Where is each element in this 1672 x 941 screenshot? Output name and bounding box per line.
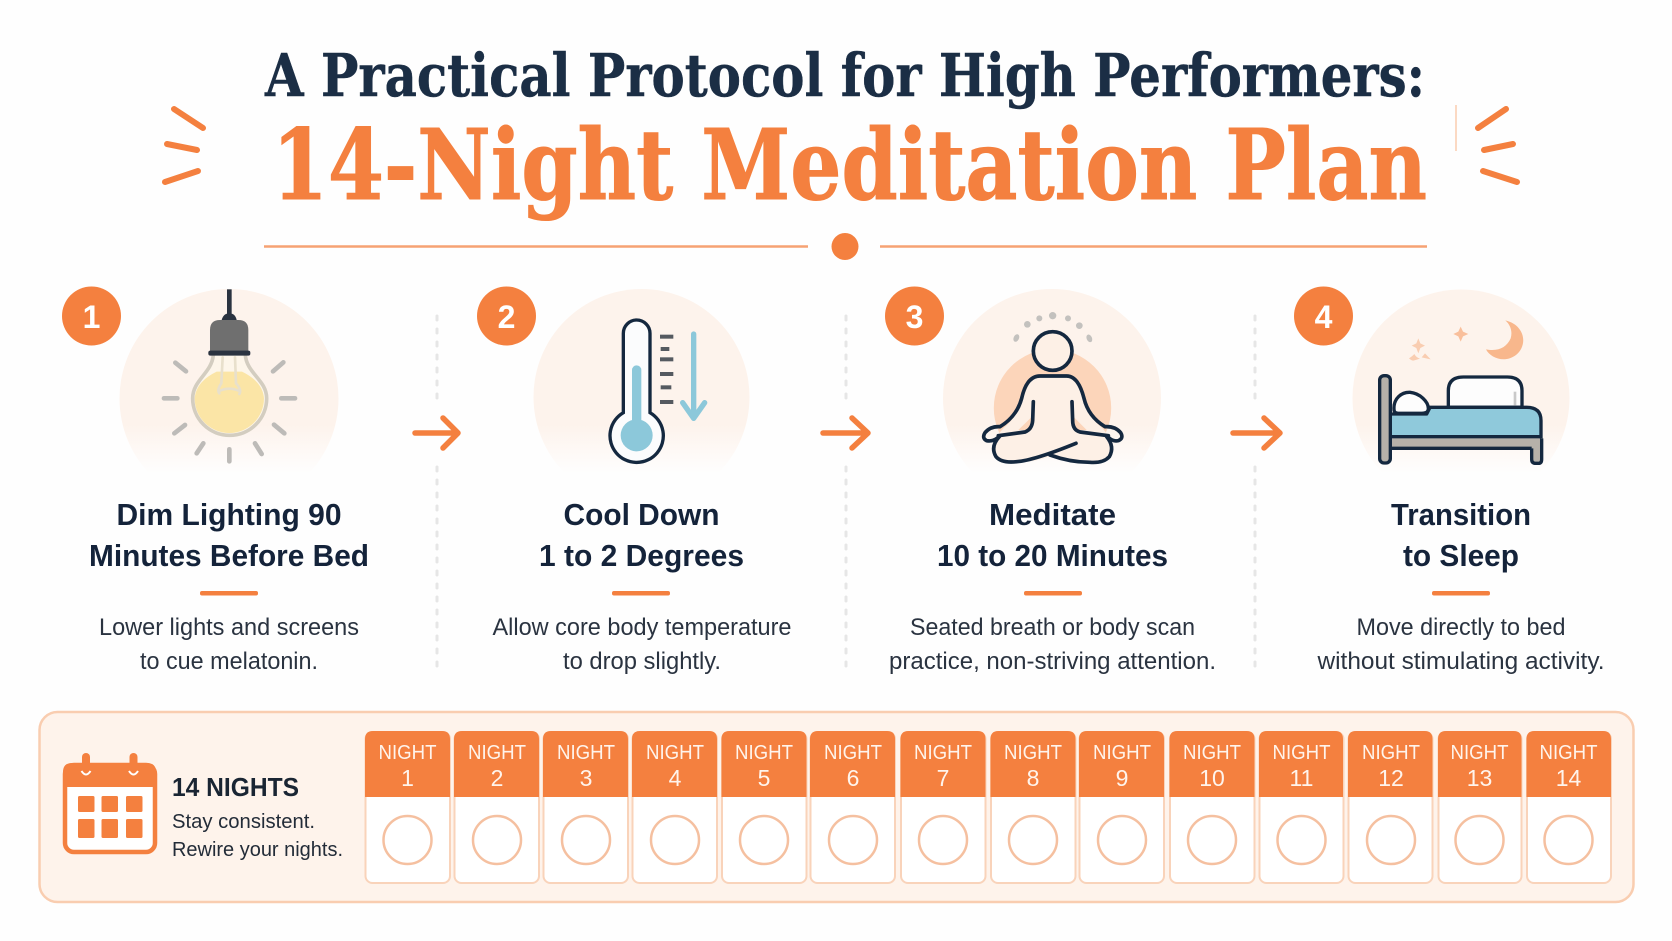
heading: to Sleep [1403,538,1519,573]
night card 10 [1170,731,1254,883]
tracker caption: Stay consistent. [172,810,315,833]
night card 3: NIGHT [557,742,615,764]
tracker caption: Rewire your nights. [172,838,343,861]
night card 4: 4 [669,765,682,791]
icon: left sparkle rays [165,109,203,182]
heading: 1 to 2 Degrees [539,538,744,573]
description: Seated breath or body scan [910,614,1195,641]
night card 7: 7 [937,765,949,791]
icon: calendar [63,753,156,852]
heading: Meditate [989,497,1116,532]
icon: right sparkle rays [1456,105,1517,182]
night card 8: NIGHT [1004,742,1062,764]
night card 10: 10 [1199,765,1225,791]
night card 6: NIGHT [824,742,882,764]
description: practice, non-striving attention. [889,648,1216,675]
description: without stimulating activity. [1316,648,1604,675]
heading [937,497,1168,573]
description [99,614,359,675]
accent rule [1432,591,1490,596]
title line 2: 14-Night Meditation Plan [272,108,1427,222]
heading: Cool Down [564,497,720,532]
night card 11 [1259,731,1344,883]
panel: step 3 [885,286,1216,675]
title [264,41,1427,222]
accent rule [1024,591,1082,596]
icon: light bulb [120,289,338,508]
night card 6 [810,731,895,883]
heading: Minutes Before Bed [89,538,369,573]
night card 3: 3 [580,765,592,791]
description: Move directly to bed [1356,614,1566,641]
night card 10: NIGHT [1183,742,1241,764]
night card 8 [990,731,1076,883]
night card 14: 14 [1556,765,1581,791]
night card 6: 6 [847,765,859,791]
description: Allow core body temperature [492,614,792,641]
night card 5: 5 [758,765,770,791]
icon: bed with moon and stars [1352,290,1570,506]
icon: meditating figure [943,289,1161,464]
badge 2 [477,286,536,346]
night card 12: 12 [1378,765,1404,791]
night card 11: NIGHT [1272,742,1330,764]
badge 3 [885,286,944,346]
arrow: step 1 to 2 [415,418,458,448]
arrow: step 2 to 3 [823,418,868,448]
description: to drop slightly. [563,648,721,675]
heading: Transition [1391,497,1531,532]
night card 7: NIGHT [914,742,972,764]
badge 1 [62,286,121,346]
night card 13: NIGHT [1450,742,1508,764]
night card 14: NIGHT [1540,742,1598,764]
badge 4: 4 [1315,299,1333,335]
night card 3 [543,731,628,883]
heading [1391,497,1531,573]
description [889,614,1216,675]
description: Lower lights and screens [99,614,359,641]
night card 2: NIGHT [468,742,526,764]
night card 11: 11 [1290,765,1313,791]
arrow: step 3 to 4 [1233,418,1280,448]
night card 8: 8 [1027,765,1039,791]
night card 9: NIGHT [1093,742,1151,764]
night card 13 [1438,731,1522,883]
description [492,614,792,675]
night card 9: 9 [1116,765,1128,791]
night card 4: NIGHT [646,742,704,764]
description: to cue melatonin. [140,648,318,675]
night card 5: NIGHT [735,742,793,764]
night card 12: NIGHT [1362,742,1420,764]
night card 1: 1 [401,765,414,791]
step dividers [437,316,1255,668]
night card 13: 13 [1467,765,1492,791]
badge 1: 1 [83,299,100,335]
accent rule [200,591,258,596]
night card 1: NIGHT [378,742,436,764]
description [1316,614,1604,675]
night card 1 [365,731,450,883]
tracker caption [172,772,343,861]
icon: thermometer [534,289,750,505]
heading [89,497,369,573]
tracker caption: 14 NIGHTS [172,772,299,802]
badge 2: 2 [498,299,515,335]
panel: 14 nights tracker [40,712,1634,902]
heading [539,497,744,573]
night card 2: 2 [491,765,503,791]
panel: step 4 [1294,286,1604,675]
badge 3: 3 [906,299,923,335]
accent rule [612,591,670,596]
night card 2 [454,731,539,883]
night card 14 [1526,731,1611,883]
title divider [264,233,1427,260]
night card 5 [722,731,806,883]
night card 9 [1079,731,1164,883]
night card 7 [900,731,986,883]
night card 4 [632,731,717,883]
heading: 10 to 20 Minutes [937,538,1168,573]
badge 4 [1294,286,1353,346]
panel: step 2 [477,286,792,675]
night card 12 [1348,731,1432,883]
heading: Dim Lighting 90 [116,497,342,532]
title line 1: A Practical Protocol for High Performers: [264,41,1425,110]
panel: step 1 [62,286,369,675]
